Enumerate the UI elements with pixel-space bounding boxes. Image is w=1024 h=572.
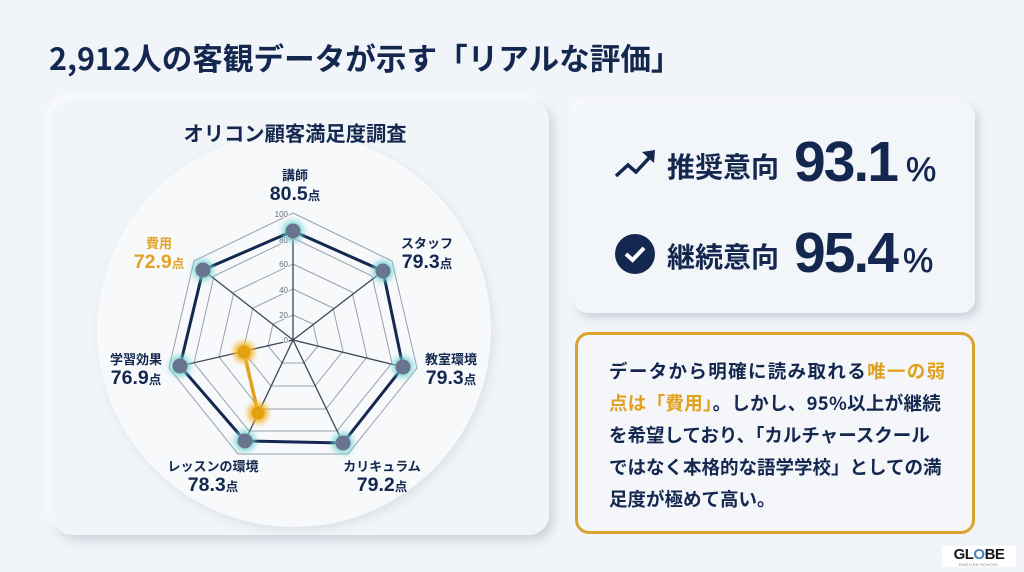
label: 講師 <box>270 165 320 205</box>
label: 費用: 72.9点 <box>134 251 184 273</box>
label: 費用 <box>134 233 184 273</box>
label: レッスンの環境: レッスンの環境 <box>167 456 258 475</box>
logo wordmark: GLOBE <box>954 546 1004 563</box>
panel: conclusion callout: 点は「費用」。しかし、95%以上が継続 <box>609 390 941 416</box>
axis scale labels <box>275 210 289 345</box>
label: 教室環境 <box>425 349 477 389</box>
panel: conclusion callout: を希望しており、「カルチャースクール <box>609 422 930 448</box>
icon: check circle <box>615 234 655 274</box>
data markers: teal glow <box>170 220 414 454</box>
label: スタッフ <box>401 233 453 273</box>
label: スタッフ: 79.3点 <box>402 251 452 273</box>
label: 学習効果: 学習効果 <box>110 349 162 368</box>
logo: GLOBE <box>942 546 1016 567</box>
metric label: 継続意向: 継続意向 <box>667 236 779 276</box>
logo subtext: ENGLISH SCHOOL <box>959 562 999 567</box>
label: カリキュラム: 79.2点 <box>357 474 407 496</box>
data line: navy <box>180 231 403 443</box>
metric label: 推奨意向: 推奨意向 <box>667 146 779 186</box>
panel: conclusion callout <box>575 332 975 534</box>
label: 教室環境: 79.3点 <box>426 367 476 389</box>
axis scale labels: 80 <box>279 236 289 245</box>
radar spokes <box>180 231 403 443</box>
metric value: 95.4%: 95.4% <box>794 221 933 285</box>
panel heading: オリコン顧客満足度調査 <box>183 117 407 147</box>
panel: conclusion callout: 足度が極めて高い。 <box>609 486 776 512</box>
panel: conclusion callout: ではなく本格的な語学学校」としての満 <box>609 454 941 480</box>
panel: radar chart <box>52 100 549 535</box>
label: レッスンの環境: 78.3点 <box>188 474 238 496</box>
highlighted cost segment <box>234 342 268 423</box>
label: カリキュラム: カリキュラム <box>343 456 421 475</box>
axis scale labels: 100 <box>275 210 289 219</box>
panel: key metrics <box>574 102 975 313</box>
metric value: 93.1%: 93.1 % <box>794 130 936 194</box>
label: 学習効果: 76.9点 <box>111 367 161 389</box>
label: 講師: 80.5点 <box>270 183 320 205</box>
label: 学習効果 <box>110 349 162 389</box>
label: 教室環境: 教室環境 <box>425 349 477 368</box>
data markers <box>172 224 410 450</box>
label: スタッフ: スタッフ <box>401 233 453 252</box>
white circle backdrop <box>97 133 491 527</box>
panel: conclusion callout: データから明確に読み取れる唯一の弱 <box>609 358 946 384</box>
axis scale labels: 40 <box>279 286 289 295</box>
icon: trending up arrow <box>614 150 655 178</box>
label: 講師: 講師 <box>282 165 308 184</box>
axis scale labels: 20 <box>279 311 289 320</box>
title: 2,912人の客観データが示す「リアルな評価」 <box>49 35 682 79</box>
radar grid <box>169 213 417 454</box>
label: 費用: 費用 <box>146 233 172 252</box>
label: レッスンの環境 <box>167 456 258 496</box>
axis scale labels: 0 <box>284 336 289 345</box>
label: カリキュラム <box>343 456 421 496</box>
axis scale labels: 60 <box>279 260 289 269</box>
